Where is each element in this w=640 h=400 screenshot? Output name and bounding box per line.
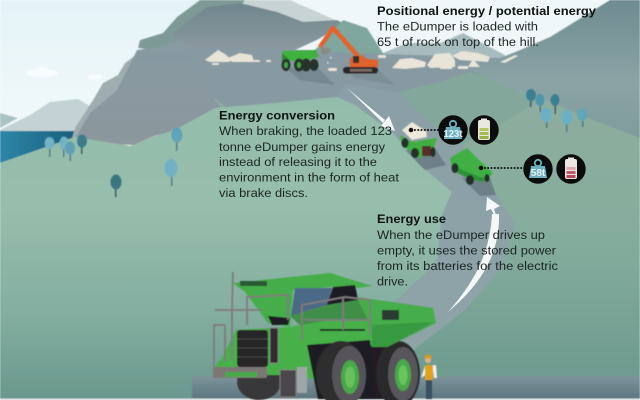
- icon: battery low: [556, 154, 586, 184]
- tree: [172, 128, 182, 151]
- tree: [60, 136, 68, 157]
- figure: worker in hi-vis vest: [421, 354, 437, 399]
- upper mountain ridge: [138, 0, 245, 55]
- tree: [562, 110, 572, 132]
- front left wheel: [237, 364, 281, 400]
- dark shadow under canopy: [268, 316, 290, 325]
- text: energy use: empty, it uses the stored power: [377, 244, 556, 258]
- distant hills: [0, 99, 100, 132]
- dark upper hill: [173, 3, 345, 56]
- text: positional energy: The eDumper is loaded with: [377, 20, 538, 34]
- icon: weight 58t: [523, 154, 553, 184]
- lower stairs and chassis: [280, 370, 296, 397]
- cab lower panel: [290, 300, 368, 325]
- main left rock: [72, 40, 222, 145]
- teal hill behind excavator: [310, 20, 385, 56]
- icon: small green dumper on hilltop: [282, 50, 335, 85]
- dump canopy: [233, 273, 372, 327]
- icon: orange excavator: [320, 28, 395, 85]
- icon: weight 58t: 58t: [531, 168, 546, 179]
- right hill: [470, 0, 640, 138]
- icon: empty dumper: [450, 148, 496, 196]
- rear dump bed: [356, 297, 436, 347]
- upper snowy mountain: [210, 0, 640, 70]
- icon: loaded dumper: [400, 122, 446, 170]
- text: energy conversion: When braking, the loaded 123: [219, 124, 392, 138]
- green patch under right hill: [398, 72, 540, 145]
- text: positional energy: 65 t of rock on top of the hill.: [377, 35, 539, 49]
- text: energy use: from its batteries for the electric: [377, 259, 558, 273]
- arrow: white descending arrow: [347, 88, 395, 131]
- plateau: [183, 48, 520, 115]
- railings: [214, 272, 370, 368]
- cab window: [291, 288, 332, 316]
- icon: weight 123t: [438, 115, 468, 145]
- grille: [237, 330, 268, 367]
- road: [337, 84, 515, 356]
- tree: [44, 137, 54, 157]
- text: energy conversion: instead of releasing it to the: [219, 155, 377, 169]
- text: energy conversion: tonne eDumper gains energy: [219, 140, 386, 154]
- text: energy use: When the eDumper drives up: [377, 228, 545, 242]
- dotted connector 123t: [409, 128, 439, 132]
- tree: [550, 94, 560, 114]
- icon: battery full: [469, 115, 499, 145]
- ground strip: [192, 376, 640, 399]
- trees: [44, 89, 587, 197]
- ladder: [270, 328, 278, 363]
- bumper: [213, 367, 267, 378]
- tree: [164, 159, 178, 186]
- tree: [526, 89, 536, 107]
- arrow: white ascending arrow: [448, 197, 500, 312]
- tree: [540, 108, 552, 128]
- text: energy conversion: Energy conversion: [219, 108, 335, 122]
- clouds: [26, 67, 102, 80]
- text: energy conversion: [219, 108, 400, 200]
- tree: [577, 109, 587, 127]
- text: positional energy: [377, 4, 596, 49]
- text: energy conversion: environment in the form of heat: [219, 170, 400, 184]
- illustration: large green eDumper: [212, 272, 436, 400]
- text: energy conversion: via brake discs.: [219, 186, 308, 200]
- rear wheel: [365, 341, 420, 400]
- text: energy use: drive.: [377, 274, 408, 288]
- lake: [0, 131, 80, 163]
- tree: [110, 174, 122, 197]
- green body: [212, 320, 373, 380]
- dotted connector 58t: [479, 166, 523, 170]
- rock piles: [205, 50, 518, 71]
- front wheel: [316, 341, 366, 400]
- rocky slope behind: [70, 48, 150, 145]
- text: energy use: Energy use: [377, 212, 446, 226]
- sky: [0, 0, 640, 170]
- tree: [536, 94, 544, 112]
- text: energy use: [377, 212, 558, 288]
- tree: [77, 134, 87, 154]
- icon: weight 123t: 123t: [444, 129, 463, 140]
- text: positional energy: Positional energy / potential energy: [377, 4, 596, 18]
- tree: [65, 142, 75, 161]
- light green slope left of road: [0, 97, 452, 400]
